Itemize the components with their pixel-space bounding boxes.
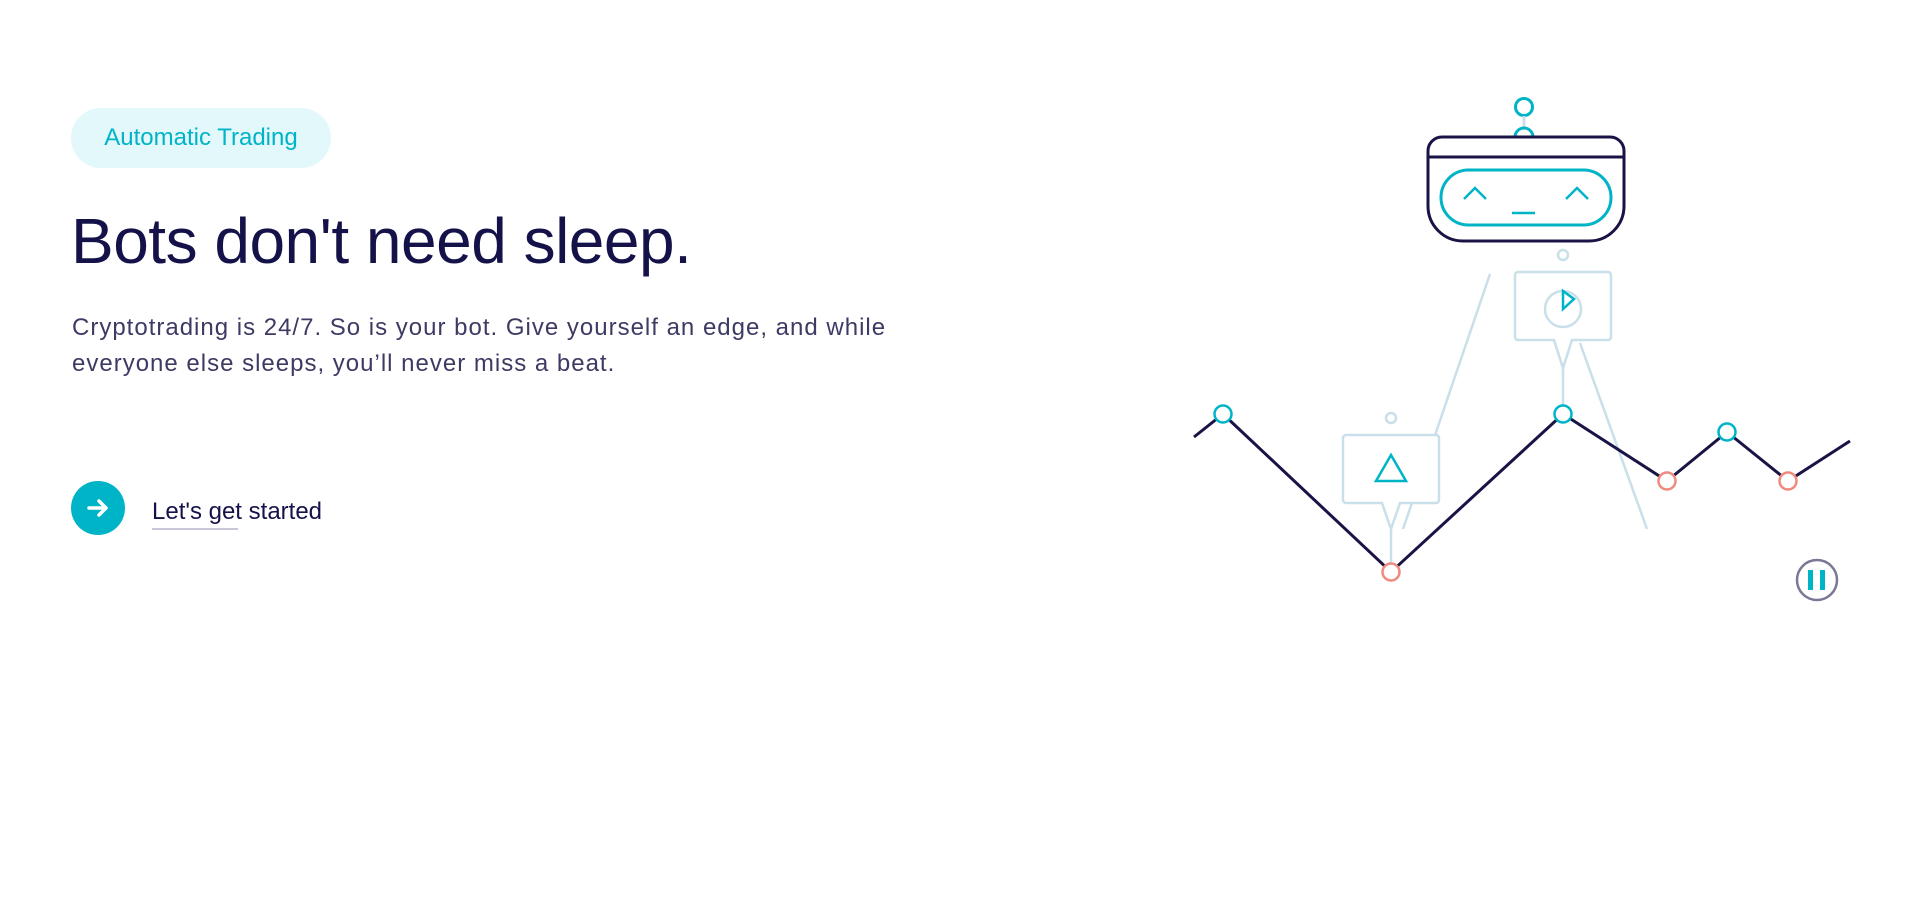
- link text: Let's get started: [152, 498, 322, 525]
- title: Bots don't need sleep.: [71, 205, 691, 277]
- icon: arrow button: [71, 481, 125, 535]
- paragraph: Cryptotrading is 24/7. So is your bot. Give yourself an edge, and while everyone else sleeps, you’ll never miss a beat.: [72, 314, 886, 377]
- price line chart: [1194, 406, 1850, 580]
- call to action: [71, 481, 322, 535]
- tag pill: Automatic Trading: [104, 124, 298, 151]
- callout: pie: [1515, 250, 1611, 410]
- diagonal light beams: [1403, 274, 1647, 529]
- robot head: [1428, 98, 1624, 241]
- callout: triangle: [1343, 413, 1439, 566]
- icon: pause button: [1797, 560, 1837, 600]
- tag pill: [71, 108, 331, 168]
